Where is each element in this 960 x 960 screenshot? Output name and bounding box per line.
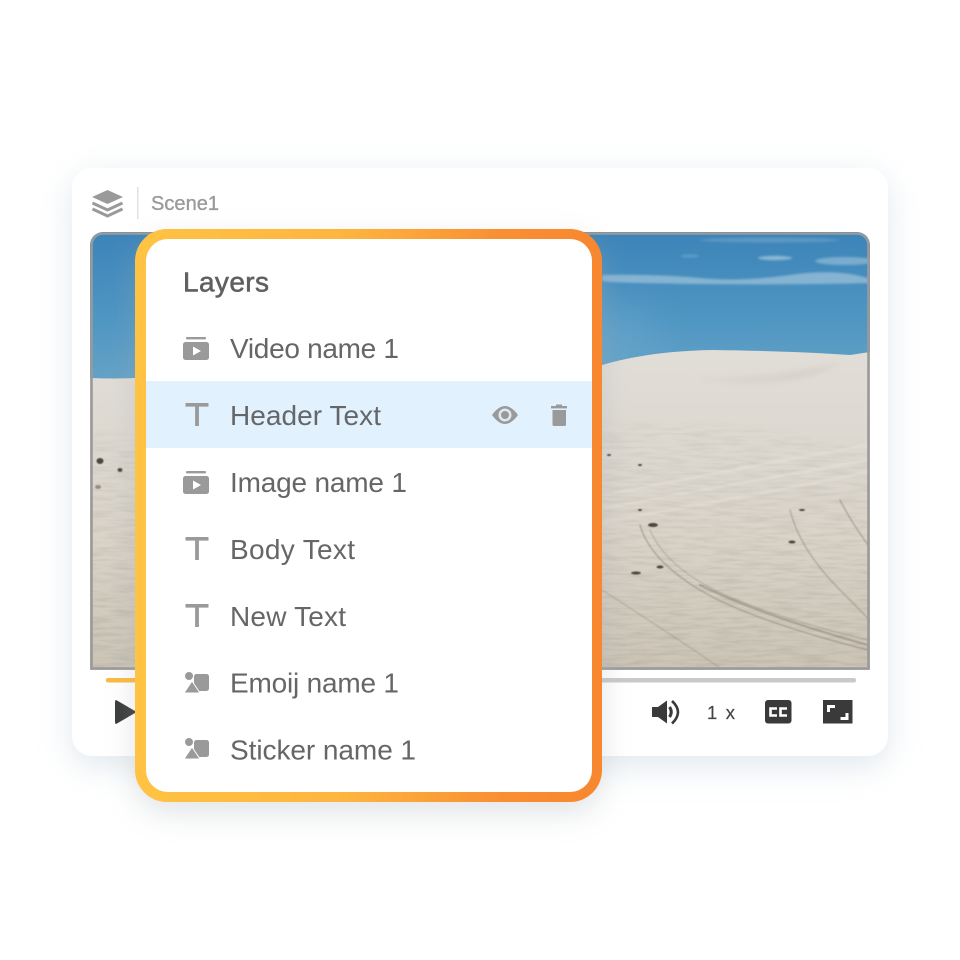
icon: trash (551, 404, 567, 426)
icon: eye (492, 406, 518, 424)
icon: volume (652, 700, 678, 724)
row: body text: Body Text (230, 534, 355, 565)
progress bar (106, 678, 856, 682)
scene name: Scene1 (151, 193, 219, 215)
icon: closed captions (765, 700, 792, 724)
icon: fullscreen (823, 700, 852, 724)
row: new text: New Text (230, 601, 346, 632)
panel heading: Layers (183, 266, 269, 298)
playback speed: 1 x (707, 702, 736, 723)
row: header text, selected: Header Text (230, 400, 381, 431)
row: emoji: Emoij name 1 (230, 668, 399, 698)
row: header text, selected (146, 381, 592, 448)
layers panel (135, 229, 602, 813)
icon: play (115, 700, 136, 724)
icon: layers stack (92, 190, 123, 216)
row: video: Video name 1 (230, 333, 399, 364)
video frame: desert photo (90, 232, 875, 670)
row: image: Image name 1 (230, 467, 407, 498)
row: sticker: Sticker name 1 (230, 734, 416, 766)
video editor card (72, 168, 888, 766)
